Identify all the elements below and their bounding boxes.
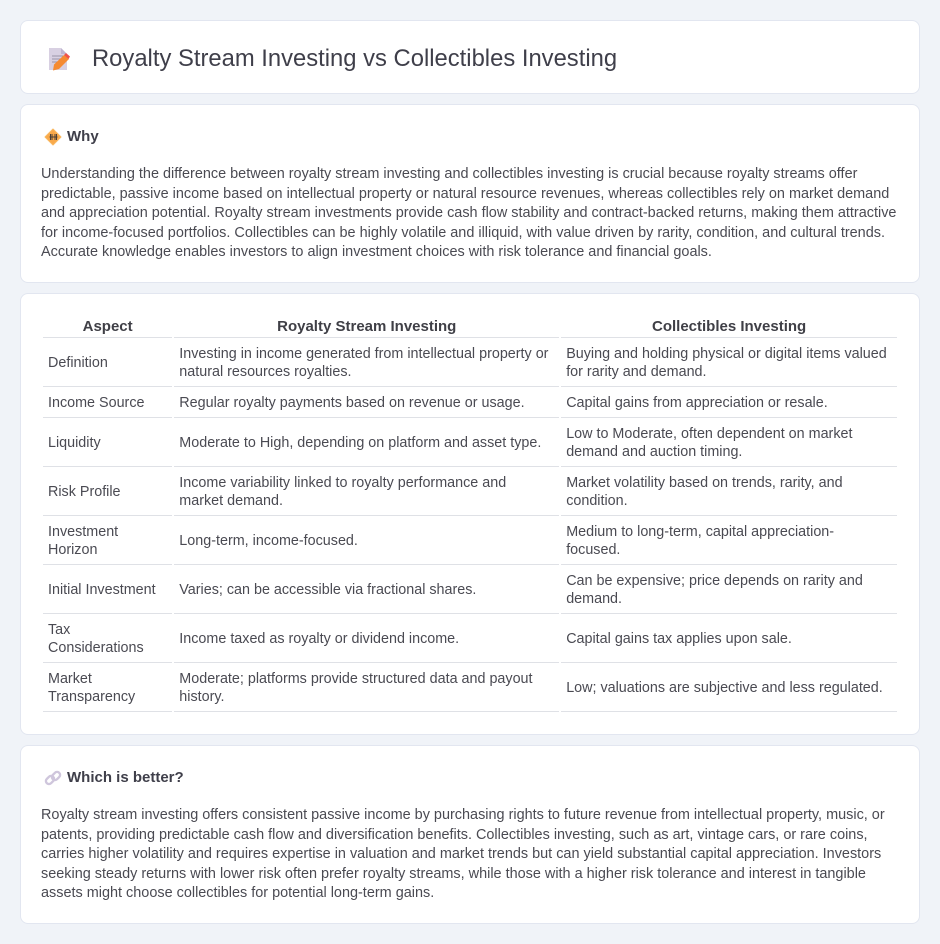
comparison table: Can be expensive; price depends on rarity and <box>566 573 863 589</box>
comparison table: Definition <box>48 355 108 371</box>
comparison table <box>43 318 897 712</box>
comparison table: for rarity and demand. <box>566 364 707 380</box>
comparison table: Capital gains tax applies upon sale. <box>566 631 792 647</box>
comparison table: Transparency <box>48 689 135 705</box>
text block: which is better: patents, providing predictable cash flow and diversification benefits. Collectibles investing, such as art, vintage cars, or rare coins, <box>41 827 868 843</box>
text block: why <box>41 166 896 260</box>
comparison table: Risk Profile <box>48 484 121 500</box>
heading: why: Why <box>67 128 99 145</box>
comparison table: Horizon <box>48 542 97 558</box>
comparison table: Buying and holding physical or digital items valued <box>566 346 887 362</box>
text block: which is better: Royalty stream investing offers consistent passive income by purchasing rights to future revenue from intellectual property, music, or <box>41 807 885 823</box>
comparison table: history. <box>179 689 224 705</box>
text block: why: Accurate knowledge enables investors to align investment choices with risk tolerance and financial goals. <box>41 244 712 260</box>
panel: why <box>20 104 920 283</box>
text block: why: for income-focused portfolios. Collectibles can be highly volatile and illiquid, with value driven by rarity, condition, and cultural trends. <box>41 225 885 241</box>
text block: which is better: assets might choose collectibles for potential long-term gains. <box>41 885 434 901</box>
comparison table: Considerations <box>48 640 144 656</box>
comparison table: focused. <box>566 542 620 558</box>
comparison table: natural resources royalties. <box>179 364 352 380</box>
text block: which is better: carries higher volatility and requires expertise in valuation and market trends but can yield substantial capital appreciation. Investors <box>41 846 881 862</box>
comparison table: Income Source <box>48 395 144 411</box>
comparison table: Low to Moderate, often dependent on market <box>566 426 852 442</box>
comparison table: Varies; can be accessible via fractional shares. <box>179 582 476 598</box>
comparison table: Income variability linked to royalty performance and <box>179 475 506 491</box>
panel: which is better <box>20 745 920 924</box>
comparison table: Income taxed as royalty or dividend income. <box>179 631 459 647</box>
comparison table: Moderate to High, depending on platform and asset type. <box>179 435 541 451</box>
text block: which is better: seeking steady returns with lower risk often prefer royalty streams, while those with a higher risk tolerance and interest in tangible <box>41 866 866 882</box>
panel: comparison table <box>20 293 920 735</box>
comparison table: condition. <box>566 493 628 509</box>
comparison table: Medium to long-term, capital appreciation- <box>566 524 834 540</box>
panel: header <box>20 20 920 94</box>
comparison table: market demand. <box>179 493 283 509</box>
comparison table: Investing in income generated from intellectual property or <box>179 346 548 362</box>
comparison table: demand and auction timing. <box>566 444 742 460</box>
comparison table: Tax <box>48 622 70 638</box>
text block: why: and appreciation potential. Royalty stream investments provide cash flow stability and contract-backed returns, making them attractive <box>41 205 896 221</box>
icon: warning diamond <box>44 128 62 146</box>
comparison table: Long-term, income-focused. <box>179 533 358 549</box>
icon: link <box>44 770 62 786</box>
comparison table: Investment <box>48 524 118 540</box>
icon: document with pencil <box>49 48 70 70</box>
comparison table: Capital gains from appreciation or resale. <box>566 395 828 411</box>
comparison table: Royalty Stream Investing <box>277 318 456 334</box>
comparison table: Low; valuations are subjective and less regulated. <box>566 680 883 696</box>
comparison table: Moderate; platforms provide structured data and payout <box>179 671 533 687</box>
comparison table: demand. <box>566 591 622 607</box>
comparison table: Liquidity <box>48 435 101 451</box>
comparison table: Collectibles Investing <box>652 318 806 334</box>
text block: which is better <box>41 807 885 901</box>
heading: which is better: Which is better? <box>67 769 184 786</box>
text block: why: Understanding the difference between royalty stream investing and collectibles investing is crucial because royalty streams offer <box>41 166 857 182</box>
comparison table: Regular royalty payments based on revenue or usage. <box>179 395 525 411</box>
text block: why: predictable, passive income based on intellectual property or natural resource revenues, whereas collectibles rely on market demand <box>41 186 889 202</box>
comparison table: Market volatility based on trends, rarity, and <box>566 475 843 491</box>
title: Royalty Stream Investing vs Collectibles Investing <box>92 45 617 72</box>
comparison table: Market <box>48 671 92 687</box>
comparison table: Initial Investment <box>48 582 156 598</box>
comparison table: Aspect <box>83 318 133 334</box>
